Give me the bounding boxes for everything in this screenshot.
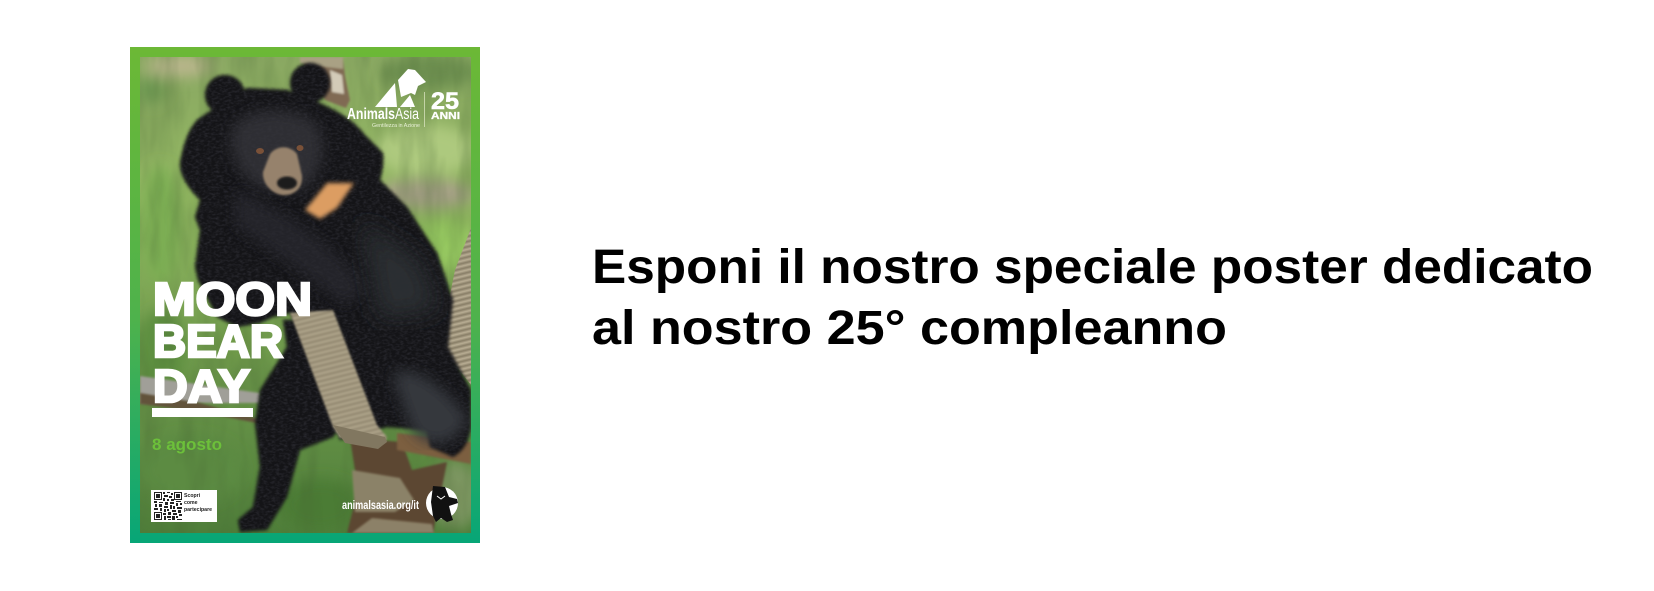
- bear muzzle: [263, 147, 302, 195]
- QR caption: come: [184, 500, 198, 506]
- bear silhouette: [180, 63, 471, 532]
- logo: Animals Asia: [347, 69, 460, 129]
- bear nose: [277, 176, 297, 190]
- poster green frame: [130, 47, 480, 543]
- bear: [180, 63, 471, 532]
- bear arm shading: [234, 195, 359, 302]
- rope post on bear arm: [290, 310, 387, 449]
- poster title: Moon Bear Day: DAY: [153, 360, 250, 412]
- QR caption: [184, 493, 212, 513]
- grass background: [134, 54, 481, 533]
- anniversary 25: 25: [431, 88, 459, 115]
- QR code card: [151, 490, 217, 522]
- chest patch: [305, 183, 354, 219]
- headline text: Esponi il nostro speciale poster dedicato: [592, 241, 1593, 294]
- bear head and torso: [180, 88, 471, 457]
- QR caption: Scopri: [184, 493, 201, 499]
- poster: [130, 47, 481, 543]
- poster title: Moon Bear Day: [153, 273, 312, 412]
- top rope: [300, 57, 350, 108]
- QR code: [154, 492, 182, 520]
- right branch: [397, 433, 471, 464]
- logo tagline: Gentilezza in Azione: [372, 123, 420, 129]
- poster title: Moon Bear Day: MOON: [153, 273, 312, 325]
- bear standing leg: [238, 320, 345, 532]
- title underline: [152, 408, 253, 417]
- bear back shading: [360, 220, 440, 320]
- right rope post: [445, 228, 471, 385]
- bear hind leg shading: [392, 371, 468, 443]
- bear eyes: [256, 145, 304, 154]
- left branch: [140, 376, 262, 424]
- bear face shading: [231, 110, 323, 190]
- QR caption: partecipare: [184, 507, 212, 513]
- icon: moon bear badge: [426, 486, 458, 522]
- poster photo: moon bear on rope-wrapped tree: [134, 54, 481, 533]
- poster title: Moon Bear Day: BEAR: [153, 315, 283, 367]
- website: animalsasia.org/it: [342, 500, 419, 512]
- logo divider: [424, 92, 425, 127]
- date: 8 agosto: [152, 436, 222, 454]
- anniversary ANNI: ANNI: [431, 111, 460, 122]
- headline text: al nostro 25° compleanno: [592, 302, 1227, 355]
- tree trunk: [347, 438, 447, 533]
- logo bear mark: [375, 69, 426, 107]
- logo wordmark: AnimalsAsia: [347, 106, 419, 123]
- bear ears: [205, 75, 245, 115]
- headline text: [592, 241, 1593, 355]
